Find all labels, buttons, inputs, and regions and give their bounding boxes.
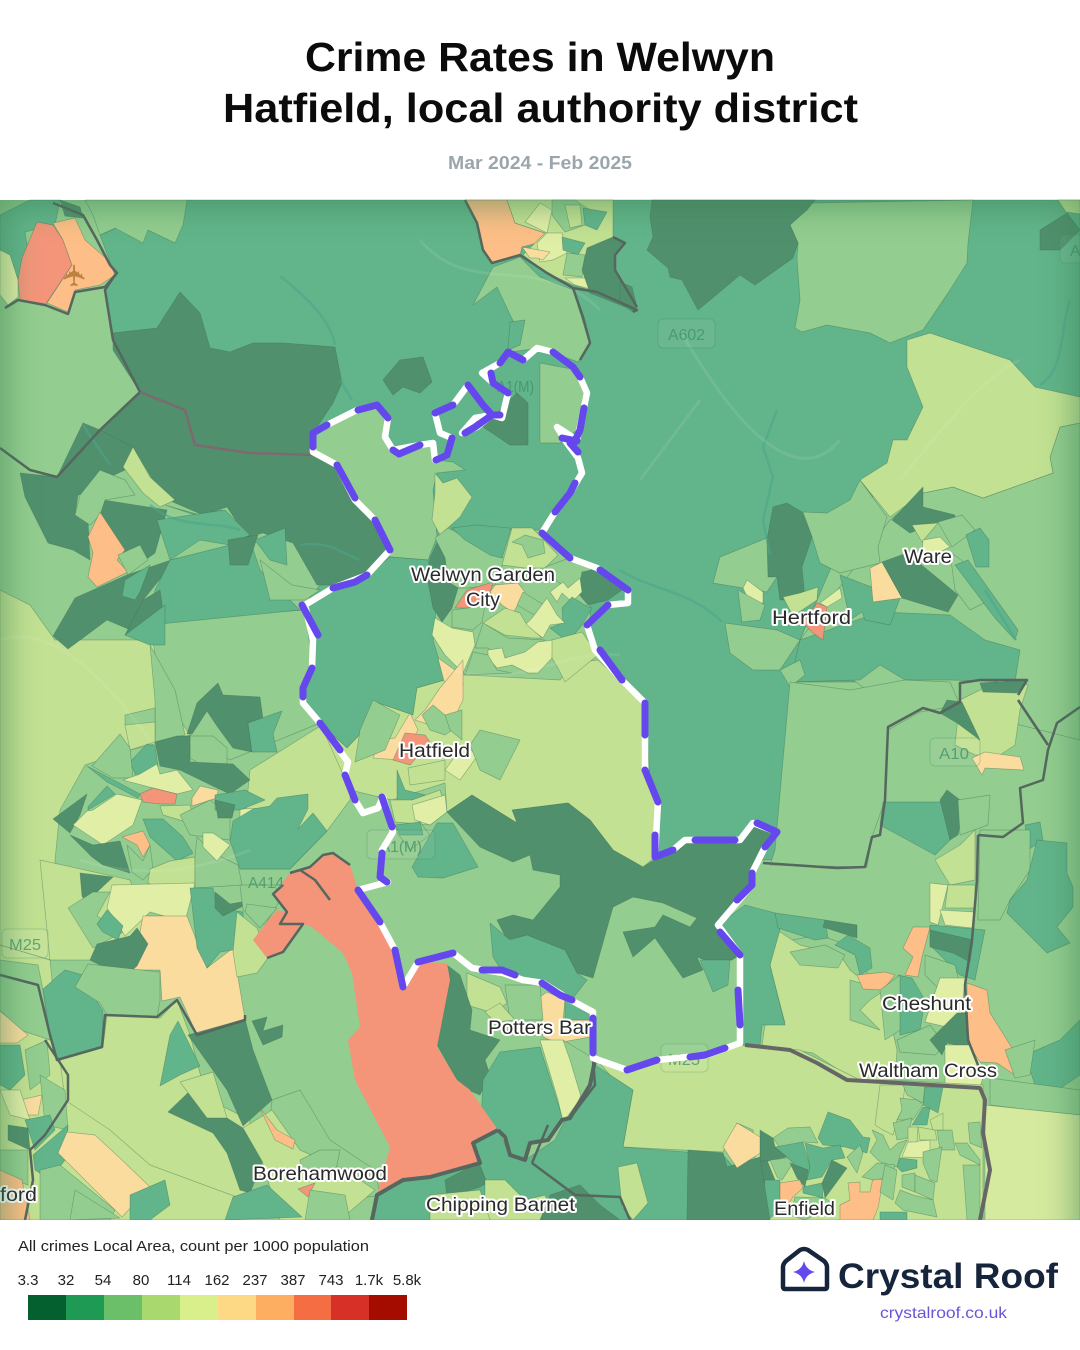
map edge vignette [0,200,1080,1220]
legend scale: 32 [58,1272,74,1289]
rivers and roads [0,240,1070,871]
place labels: Potters Bar [488,1017,592,1039]
icon: airport plane: ✈ [59,263,92,288]
red high-crime area [253,853,498,1195]
place labels: Welwyn Garden [411,564,555,586]
road shields: A1(M) [380,839,422,856]
place labels: Cheshunt [882,993,972,1015]
bottom-right town wards [597,1045,983,1220]
administrative borders [0,200,1080,1220]
legend scale: 237 [242,1272,268,1289]
road shields: A414 [248,875,284,892]
legend scale: 80 [133,1272,149,1289]
road shields: A1(M) [497,379,534,396]
airport wards [0,200,117,314]
subtitle: date range: Mar 2024 - Feb 2025 [448,153,632,173]
title: Hatfield, local authority district [223,85,858,131]
legend scale: 387 [280,1272,306,1289]
district boundary: Welwyn Hatfield [302,348,777,1070]
place labels: ford [0,1184,37,1206]
place labels: Hatfield [399,740,470,762]
east wards [713,333,1080,740]
central district wards [303,357,777,1160]
choropleth map [0,200,1080,1220]
legend scale: 114 [167,1272,191,1289]
west town wards [53,605,327,1035]
white footer [0,1220,1080,1350]
road shields: A10 [939,746,969,763]
legend scale: 54 [95,1272,111,1289]
road shields [2,235,1080,1072]
west wards [0,292,390,960]
place labels: Hertford [772,607,851,629]
south-west wards [0,945,380,1220]
website link: crystalroof.co.uk [880,1305,1008,1322]
south belt wards [370,1065,770,1220]
north cluster wards [465,200,637,362]
legend scale: 3.3 [18,1272,38,1289]
logo: Crystal Roof: Crystal Roof [838,1257,1058,1296]
legend scale: 162 [204,1272,230,1289]
place labels [0,546,997,1220]
place labels: Borehamwood [253,1163,387,1185]
south-east fringe wards [718,680,1080,1220]
road shields: A602 [668,327,705,344]
title [223,34,858,131]
logo: Crystal Roof [783,1249,1058,1296]
place labels: Waltham Cross [859,1060,997,1082]
legend title: All crimes Local Area, count per 1000 population [18,1238,369,1255]
road shields: M25 [668,1052,700,1069]
legend scale: 1.7k [355,1272,384,1289]
place labels: Ware [904,546,952,568]
place labels: City [466,589,500,611]
road shields: M25 [9,937,41,954]
legend scale [18,1272,422,1320]
north teal wards [85,200,1080,860]
legend scale: 743 [318,1272,344,1289]
title: Crime Rates in Welwyn [305,34,775,80]
place labels: Chipping Barnet [426,1194,576,1216]
place labels: Enfield [774,1198,835,1220]
legend scale: 5.8k [393,1272,422,1289]
icon: house with sparkle [783,1249,827,1289]
